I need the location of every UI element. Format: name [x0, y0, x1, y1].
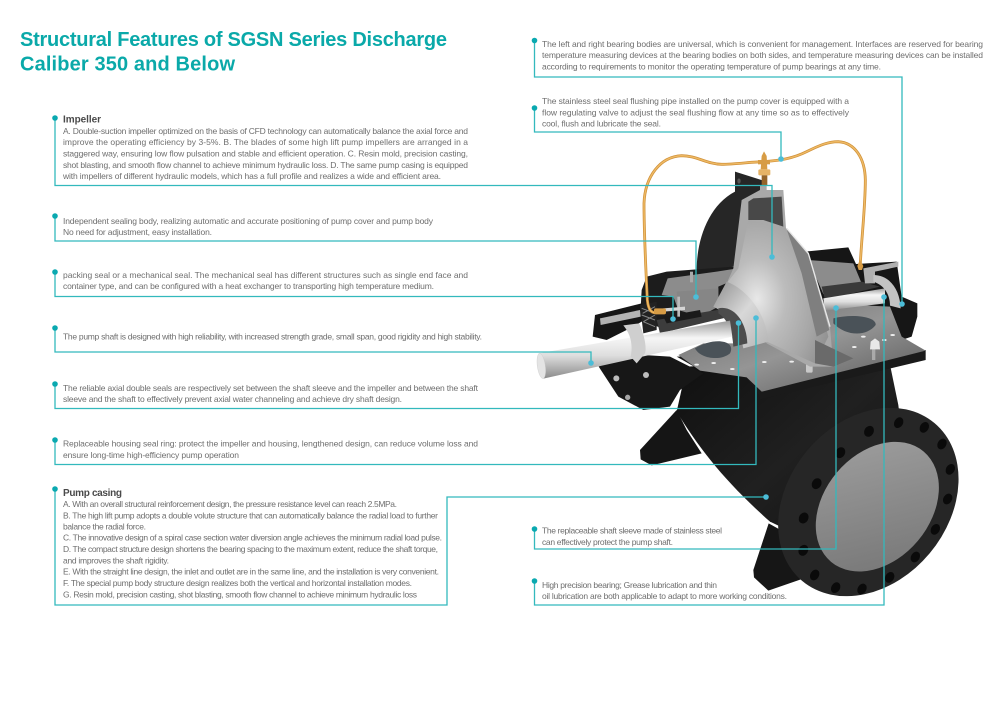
text block: with impellers of different hydraulic models, which has a full profile and realizes a wide and efficient area. [62, 171, 441, 181]
text block: E. With the straight line design, the inlet and outlet are in the same line, and the installation is very convenient. [63, 567, 439, 577]
callout: pump shaft [52, 325, 594, 366]
title [20, 29, 447, 76]
text block [542, 96, 850, 129]
end dot [763, 494, 769, 500]
start dot [532, 578, 537, 584]
text block: The stainless steel seal flushing pipe installed on the pump cover is equipped with a [542, 96, 849, 106]
pump illustration [536, 142, 996, 632]
text block: shot blasting, and smooth flow channel to achieve minimum hydraulic loss. D. The same pump casing is equipped [63, 160, 468, 170]
text block: packing seal or a mechanical seal. The mechanical seal has different structures such as single end face and [63, 270, 468, 280]
callout: shaft sleeve [532, 305, 839, 549]
text block: balance the radial force. [63, 522, 146, 532]
end dot [769, 254, 775, 260]
text block: improve the operating efficiency by 3-5%. B. The blades of some high lift pump impellers are arranged in a [63, 137, 468, 147]
leader line [55, 318, 756, 464]
left shaft [536, 321, 732, 379]
left bearing ring [623, 323, 646, 363]
text block: D. The compact structure design shortens the bearing spacing to the maximum extent, reduce the shaft torque, [63, 544, 438, 554]
text block: G. Resin mold, precision casting, shot blasting, smooth flow channel to achieve minimum hydraulic loss [63, 589, 417, 599]
leader line [55, 272, 673, 319]
casing rear dome [697, 172, 763, 273]
text block [63, 216, 434, 237]
upper left casing section [593, 267, 740, 340]
end dot [670, 316, 676, 322]
start dot [52, 437, 58, 443]
text block [63, 383, 479, 404]
leader line [534, 297, 884, 605]
text block: The left and right bearing bodies are universal, which is convenient for management. Interfaces are reserved for bearing [542, 39, 983, 49]
leader line [534, 40, 902, 304]
leader line [534, 108, 781, 159]
callout: impeller [52, 114, 775, 260]
text block: staggered way, ensuring low flow pulsation and stable and efficient operation. C. Resin mold, precision casting, [63, 148, 468, 158]
callout: sealing body [52, 213, 699, 300]
leader line [55, 489, 766, 605]
text block: No need for adjustment, easy installation. [63, 227, 212, 237]
title: Structural Features of SGSN Series Discharge [20, 29, 447, 51]
text block [542, 580, 787, 601]
leader line [55, 323, 738, 408]
leader line [55, 328, 591, 363]
text block: C. The innovative design of a spiral case section water diversion angle achieves the minimum radial load pulse. [63, 533, 442, 543]
end dot [693, 294, 699, 300]
text block: sleeve and the shaft to effectively prevent axial water channeling and achieve dry shaft design. [63, 394, 402, 404]
callout: pump casing [52, 486, 769, 605]
text block [542, 526, 722, 547]
impeller casing section [713, 185, 853, 367]
start dot [532, 38, 537, 43]
callout: axial double seals [52, 320, 741, 408]
packing and seal [663, 272, 702, 323]
support foot left [640, 410, 702, 465]
leader line [534, 308, 836, 549]
text block: The pump shaft is designed with high reliability, with increased strength grade, small span, good rigidity and high stability. [63, 332, 482, 342]
text block [63, 499, 442, 599]
text block [62, 126, 468, 181]
text block: The replaceable shaft sleeve made of stainless steel [542, 526, 722, 536]
text block: A. With an overall structural reinforcement design, the pressure resistance level can reach 2.5MPa. [63, 499, 397, 509]
start dot [532, 105, 537, 111]
text block: A. Double-suction impeller optimized on the basis of CFD technology can automatically balance the axial force and [63, 126, 468, 136]
callout: packing seal [52, 269, 676, 322]
end dot [778, 156, 784, 162]
end dot [881, 294, 887, 300]
callout: flushing pipe [532, 96, 850, 162]
callout: bearing bodies [532, 38, 983, 307]
split flange plate [677, 303, 926, 399]
text block: cool, flush and lubricate the seal. [542, 119, 661, 129]
heading: Impeller [63, 114, 101, 126]
callout: bearing [532, 294, 887, 605]
start dot [52, 325, 58, 331]
text block: oil lubrication are both applicable to adapt to more working conditions. [542, 591, 787, 601]
leader line [55, 118, 772, 257]
start dot [52, 115, 58, 121]
title: Caliber 350 and Below [20, 54, 235, 76]
text block: ensure long-time high-efficiency pump operation [63, 450, 239, 460]
text block: and improves the shaft rigidity. [63, 556, 169, 566]
text block: Replaceable housing seal ring: protect the impeller and housing, lengthened design, can reduce volume loss and [63, 439, 478, 449]
text block: according to requirements to monitor the operating temperature of pump bearings at any time. [542, 62, 881, 72]
bolts on plate [806, 338, 880, 373]
start dot [52, 381, 58, 387]
start dot [52, 269, 58, 275]
text block: B. The high lift pump adopts a double volute structure that can automatically balance the radial load to further [63, 510, 438, 520]
end dot [753, 315, 759, 321]
outlet flange [741, 372, 996, 632]
text block [63, 270, 468, 291]
text block: container type, and can be configured with a heat exchanger to transporting high temperature medium. [63, 281, 434, 291]
text block: temperature measuring devices at the bearing bodies on both sides, and temperature measuring devices can be installed [542, 50, 983, 60]
leader line [55, 216, 696, 297]
right bearing section [808, 260, 898, 300]
start dot [52, 486, 58, 492]
text block [542, 39, 983, 72]
text block [63, 439, 478, 460]
text block: can effectively protect the pump shaft. [542, 537, 673, 547]
pump body lower casing [677, 357, 907, 553]
callout: housing seal ring [52, 315, 759, 464]
text block: High precision bearing; Grease lubrication and thin [542, 580, 717, 590]
packing ring [640, 302, 657, 333]
right bearing ring [873, 275, 901, 308]
start dot [532, 526, 537, 532]
text block: F. The special pump body structure design realizes both the vertical and horizontal installation modes. [63, 578, 412, 588]
text block: The reliable axial double seals are respectively set between the shaft sleeve and the impeller and between the shaft [63, 383, 479, 393]
end dot [899, 301, 905, 307]
end dot [736, 320, 741, 326]
brass fittings [654, 151, 863, 314]
support foot right [753, 523, 807, 591]
text block: flow regulating valve to adjust the seal flushing flow at any time so as to effectively [542, 107, 850, 117]
text block: Independent sealing body, realizing automatic and accurate positioning of pump cover and pump body [63, 216, 434, 226]
flushing pipe [644, 142, 865, 313]
end dot [833, 305, 839, 311]
end dot [588, 360, 594, 366]
start dot [52, 213, 58, 219]
lug hole [737, 178, 741, 184]
right shaft [823, 288, 885, 311]
right bearing housing black [805, 247, 917, 340]
heading: Pump casing [63, 488, 122, 499]
left bearing bracket black [599, 353, 703, 410]
